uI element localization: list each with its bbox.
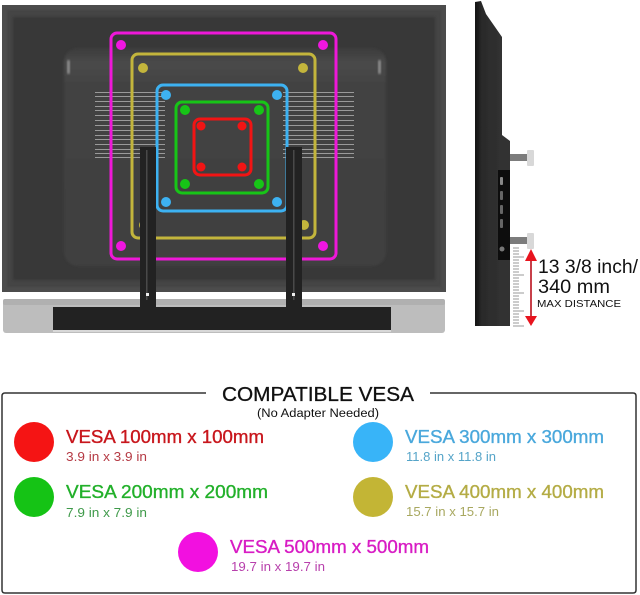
legend item: green: VESA 200mm x 200mm	[66, 481, 268, 502]
legend item: red	[14, 422, 264, 464]
legend item: red: 3.9 in x 3.9 in	[66, 449, 147, 464]
legend frame	[2, 393, 636, 593]
upper bolt	[510, 150, 534, 166]
distance label: 340 mm	[538, 277, 610, 298]
ruler	[513, 248, 524, 326]
blue 300mm square	[157, 85, 287, 211]
magenta 500mm square	[111, 33, 336, 259]
green 200mm square	[176, 102, 268, 193]
yellow 400mm square	[132, 54, 315, 238]
distance label: 13 3/8 inch/	[538, 257, 639, 278]
TV rear view	[2, 5, 446, 292]
TV side view	[475, 1, 534, 326]
legend heading: (No Adapter Needed)	[257, 408, 379, 420]
legend item: magenta: VESA 500mm x 500mm	[230, 536, 429, 557]
legend item: green	[14, 477, 268, 520]
distance label: MAX DISTANCE	[537, 298, 621, 310]
soundbar	[3, 299, 445, 333]
legend item: yellow	[353, 477, 604, 519]
legend heading: COMPATIBLE VESA	[222, 384, 415, 406]
VESA mounting squares	[111, 33, 336, 259]
legend item: blue: 11.8 in x 11.8 in	[406, 449, 496, 464]
legend item: magenta: 19.7 in x 19.7 in	[231, 559, 325, 574]
lower bolt	[510, 233, 534, 249]
distance arrow	[525, 249, 537, 326]
distance label	[537, 257, 639, 310]
legend item: blue	[353, 422, 604, 464]
mounting brackets	[140, 147, 302, 307]
legend item: yellow: VESA 400mm x 400mm	[405, 481, 604, 502]
left bracket	[140, 147, 156, 307]
port panel	[498, 170, 510, 260]
legend item: magenta	[178, 532, 429, 574]
legend item: green: 7.9 in x 7.9 in	[66, 505, 147, 520]
red 100mm square	[194, 119, 251, 175]
legend item: blue: VESA 300mm x 300mm	[405, 426, 604, 447]
legend heading	[222, 384, 415, 420]
legend item: yellow: 15.7 in x 15.7 in	[406, 504, 499, 519]
legend item: red: VESA 100mm x 100mm	[66, 426, 264, 447]
right bracket	[286, 147, 302, 307]
